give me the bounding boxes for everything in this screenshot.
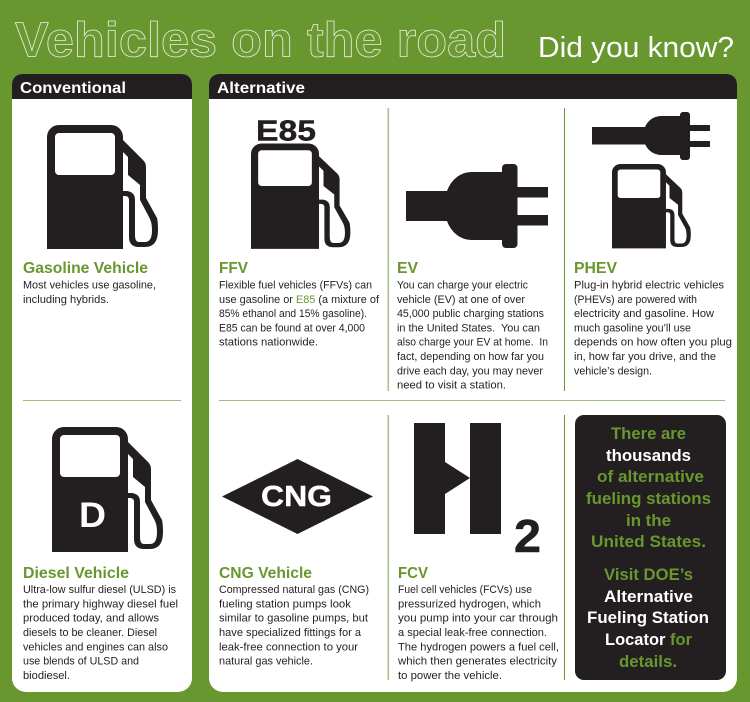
text: EV: EV bbox=[397, 260, 418, 277]
text: CNG vehicle: leak-free connection to your bbox=[219, 641, 358, 653]
text: PHEV: electricity and gasoline. How bbox=[574, 308, 715, 320]
callout: fueling station locator bbox=[575, 415, 726, 680]
icon: E85 pump bbox=[251, 116, 350, 249]
text: EV: drive each day, you may never bbox=[397, 365, 543, 377]
text: CNG vehicle: natural gas vehicle. bbox=[219, 656, 313, 668]
text: diesel vehicle: biodiesel. bbox=[23, 670, 70, 682]
text: FCV: FCV bbox=[398, 565, 428, 582]
text: diesel vehicle: Ultra-low sulfur diesel (ULSD) is bbox=[23, 584, 176, 596]
callout: fueling station locator: Visit DOE’s bbox=[604, 566, 693, 584]
icon: CNG diamond: CNG bbox=[261, 481, 332, 513]
subtitle: did you know: Did you know? bbox=[538, 32, 734, 64]
text: gasoline vehicle: Gasoline Vehicle bbox=[23, 260, 148, 277]
icon: diesel pump: D bbox=[79, 496, 106, 535]
text: FCV: pressurized hydrogen, which bbox=[398, 598, 541, 610]
callout: fueling station locator: Fueling Station bbox=[587, 609, 709, 627]
text: PHEV: Plug-in hybrid electric vehicles bbox=[574, 280, 724, 292]
callout: fueling station locator: Locator for bbox=[605, 631, 693, 649]
icon: CNG diamond bbox=[222, 459, 373, 534]
callout: fueling station locator: fueling stations bbox=[586, 490, 711, 508]
text: diesel vehicle: Diesel Vehicle bbox=[23, 565, 129, 582]
text: FCV: a special leak-free connection. bbox=[398, 627, 547, 639]
text: FFV bbox=[219, 260, 380, 349]
text: gasoline vehicle bbox=[23, 260, 156, 306]
panel: conventional bbox=[12, 74, 192, 692]
text: EV: You can charge your electric bbox=[397, 280, 528, 292]
text: FFV: E85 can be found at over 4,000 bbox=[219, 322, 365, 334]
text: FFV: FFV bbox=[219, 260, 248, 277]
text: CNG vehicle: have specialized fittings for a bbox=[219, 627, 362, 639]
text: CNG vehicle: fueling station pumps look bbox=[219, 598, 351, 610]
text: FFV: use gasoline or E85 (a mixture of bbox=[219, 294, 380, 306]
text: EV: also charge your EV at home. In bbox=[397, 337, 548, 349]
text: diesel vehicle: produced today, and allows bbox=[23, 613, 159, 625]
text: gasoline vehicle: Most vehicles use gasoline, bbox=[23, 280, 156, 292]
callout: fueling station locator: United States. bbox=[591, 533, 706, 551]
text: EV: vehicle (EV) at one of over bbox=[397, 294, 525, 306]
callout: fueling station locator: in the bbox=[626, 512, 671, 530]
text: PHEV bbox=[574, 260, 732, 377]
heading: conventional: Conventional bbox=[20, 80, 126, 97]
callout: fueling station locator: Alternative bbox=[604, 588, 693, 606]
text: EV bbox=[397, 260, 548, 392]
text: diesel vehicle: vehicles and engines can also bbox=[23, 641, 168, 653]
title: Vehicles on the road bbox=[15, 14, 506, 68]
text: EV: in the United States. You can bbox=[397, 322, 540, 334]
text: CNG vehicle: similar to gasoline pumps, but bbox=[219, 613, 368, 625]
text: FCV: which then generates electricity bbox=[397, 656, 557, 668]
text: FCV: Fuel cell vehicles (FCVs) use bbox=[398, 584, 532, 596]
text: EV: fact, depending on how far you bbox=[397, 351, 544, 363]
text: FFV: stations nationwide. bbox=[219, 337, 318, 349]
text: diesel vehicle: the primary highway diesel fuel bbox=[23, 598, 178, 610]
icon: gasoline pump bbox=[47, 125, 158, 249]
text: FCV: to power the vehicle. bbox=[398, 670, 502, 682]
icon: diesel pump bbox=[52, 427, 163, 552]
callout: fueling station locator: details. bbox=[619, 653, 677, 671]
text: EV: need to visit a station. bbox=[397, 380, 506, 392]
text: PHEV: much gasoline you’ll use bbox=[574, 322, 691, 334]
text: diesel vehicle: diesels to be cleaner. Diesel bbox=[23, 627, 157, 639]
callout: fueling station locator: of alternative bbox=[597, 468, 704, 486]
text: CNG vehicle bbox=[219, 565, 369, 668]
icon: hydrogen H2 bbox=[414, 423, 541, 562]
text: EV: 45,000 public charging stations bbox=[397, 308, 544, 320]
icon: hydrogen H2: 2 bbox=[514, 510, 541, 562]
panel: alternative bbox=[209, 74, 737, 692]
heading: alternative: Alternative bbox=[217, 80, 305, 97]
icon: PHEV plug and pump bbox=[592, 112, 710, 248]
text: PHEV: depends on how often you plug bbox=[574, 337, 732, 349]
text: CNG vehicle: Compressed natural gas (CNG) bbox=[219, 584, 369, 596]
callout: fueling station locator: There are bbox=[611, 425, 686, 443]
text: FFV: Flexible fuel vehicles (FFVs) can bbox=[219, 280, 372, 292]
text: PHEV: (PHEVs) are powered with bbox=[574, 294, 697, 306]
text: PHEV: vehicle’s design. bbox=[574, 365, 652, 377]
icon: E85 pump: E85 bbox=[256, 116, 316, 148]
text: PHEV: in, how far you drive, and the bbox=[574, 351, 716, 363]
callout: fueling station locator: thousands bbox=[606, 447, 691, 465]
text: FFV: 85% ethanol and 15% gasoline). bbox=[219, 308, 367, 320]
text: diesel vehicle: use blends of ULSD and bbox=[23, 656, 139, 668]
text: gasoline vehicle: including hybrids. bbox=[23, 294, 109, 306]
text: FCV: The hydrogen powers a fuel cell, bbox=[398, 641, 559, 653]
text: diesel vehicle bbox=[23, 565, 178, 682]
text: FCV: you pump into your car through bbox=[398, 613, 558, 625]
text: CNG vehicle: CNG Vehicle bbox=[219, 565, 312, 582]
text: FCV bbox=[397, 565, 559, 682]
icon: EV plug bbox=[406, 164, 548, 248]
text: PHEV: PHEV bbox=[574, 260, 617, 277]
